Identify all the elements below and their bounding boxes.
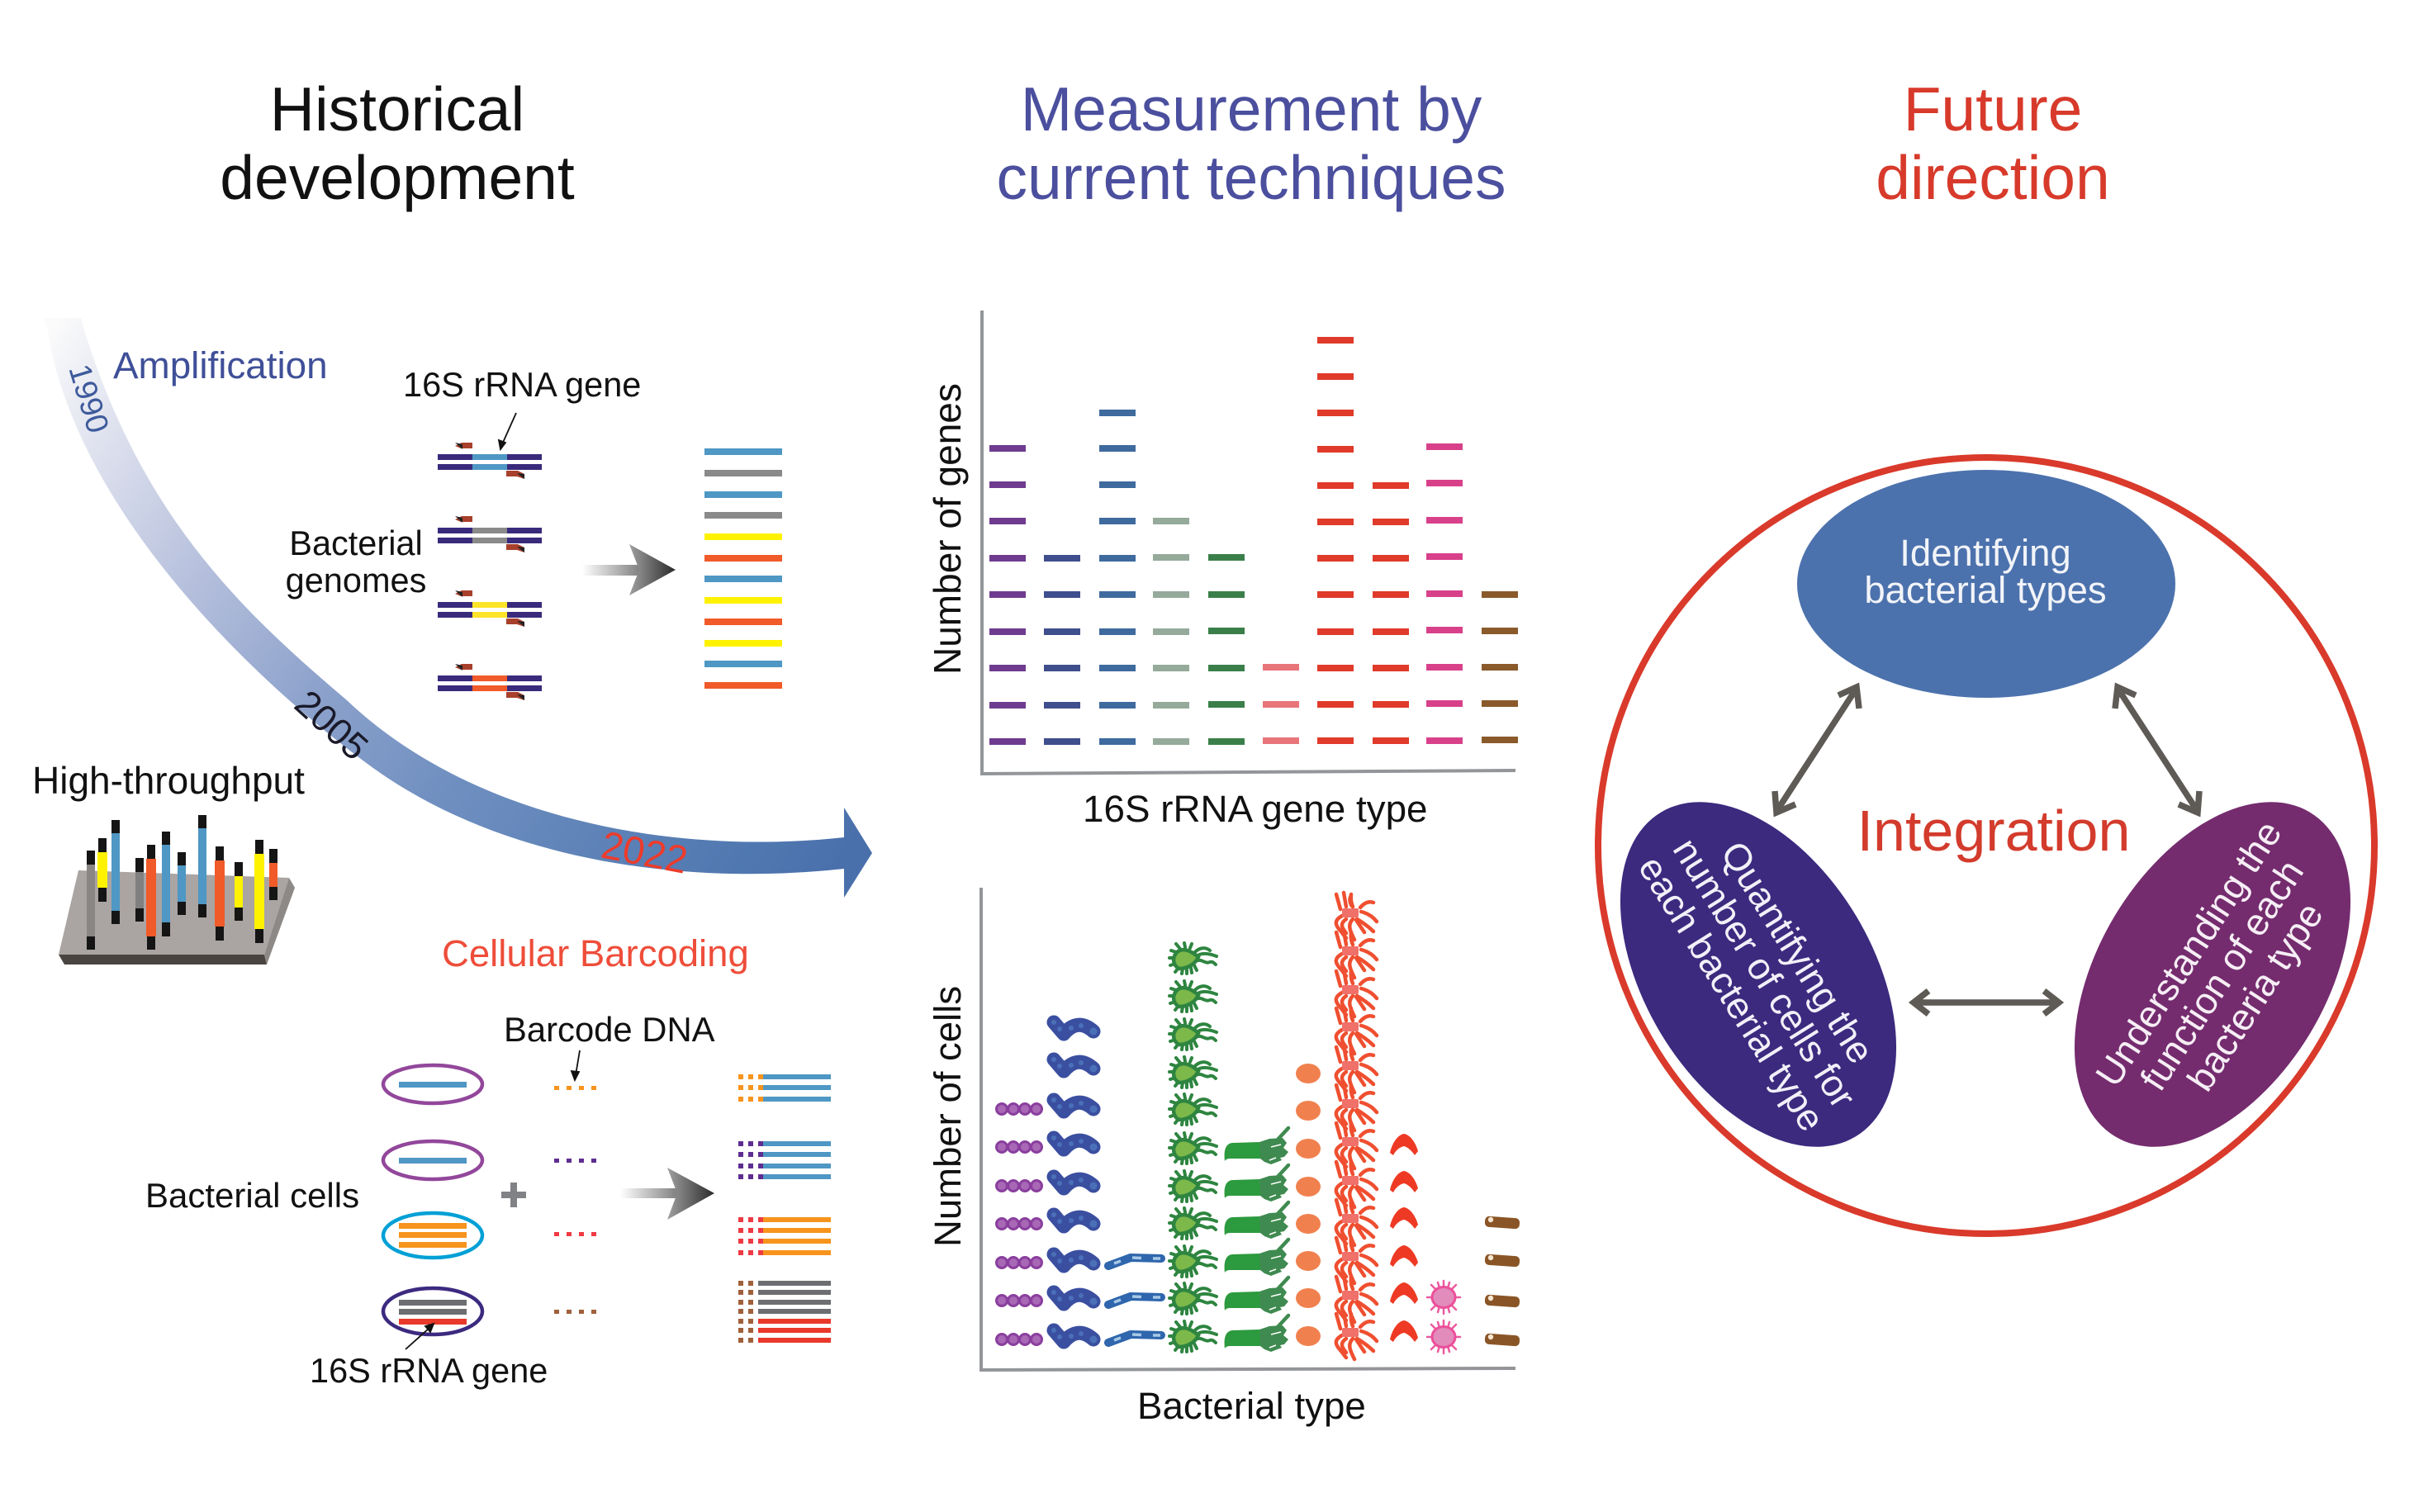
year 2022: 2022	[598, 822, 691, 882]
title: Measurement by current techniques: current techniques	[996, 143, 1506, 212]
oval: quantifying cells: Quantifying the	[1713, 834, 1882, 1071]
icons: red spiders	[1336, 893, 1377, 1359]
title: Historical development	[220, 74, 575, 212]
bars: column 7	[1317, 337, 1354, 744]
arrow: amplification	[582, 544, 676, 595]
label: Bacterial genomes: Bacterial	[289, 524, 423, 562]
oval: quantifying cells: number of cells for	[1665, 831, 1864, 1115]
arrow: 16S pointer	[499, 413, 516, 449]
heading: Amplification: Amplification	[113, 344, 328, 386]
title: Measurement by current techniques	[996, 74, 1506, 212]
chart: genes by 16S rRNA gene type	[926, 310, 1518, 830]
oval: identifying bacterial types: Identifying	[1900, 532, 2071, 574]
title: Future direction	[1876, 74, 2110, 212]
label: Integration: Integration	[1857, 799, 2130, 863]
icon: plus	[501, 1183, 526, 1207]
arrow: 16S pointer in cell	[406, 1324, 434, 1349]
chart: cells by bacterial type	[927, 888, 1520, 1427]
amplified products	[704, 448, 782, 689]
icons: blue curved chains	[1051, 1020, 1097, 1343]
oval: understanding function: Understanding the	[2087, 813, 2290, 1093]
label: Bacterial genomes	[286, 524, 426, 600]
bars: column 6	[1263, 664, 1299, 744]
y axis label: Number of genes	[926, 383, 969, 675]
bars: column 3	[1099, 410, 1136, 745]
label: 16S rRNA gene: 16S rRNA gene	[403, 365, 641, 404]
year 1990: 1990	[61, 360, 115, 437]
arrow: top to right	[2115, 687, 2199, 813]
arrow: top to left	[1775, 687, 1859, 813]
bars: column 10	[1482, 591, 1518, 743]
y axis label: Number of cells	[927, 986, 969, 1247]
barcoded products	[738, 1074, 831, 1343]
bars: column 8	[1373, 482, 1409, 744]
icons: green spiky cells	[1169, 943, 1217, 1352]
oval: quantifying cells	[1563, 754, 1953, 1195]
oval: understanding function	[2018, 754, 2407, 1195]
icon: sequencing chip	[59, 815, 295, 965]
x axis label: Bacterial type	[1137, 1385, 1366, 1427]
barcode DNA dashes	[554, 1086, 596, 1314]
axes	[982, 310, 1515, 774]
arrow: barcode pointer	[572, 1050, 580, 1080]
icons: pink cells	[1427, 1281, 1460, 1353]
title: Measurement by current techniques: Measurement by	[1021, 74, 1482, 144]
year 2005: 2005	[287, 682, 377, 768]
bars: column 9	[1426, 443, 1463, 744]
bars: column 2	[1044, 555, 1080, 745]
icons: red curved cells	[1390, 1134, 1418, 1342]
title: Future direction: direction	[1876, 143, 2110, 212]
icons: orange cocci	[1296, 1064, 1321, 1346]
oval: identifying bacterial types	[1797, 470, 2175, 698]
oval: quantifying cells: each bacterial type	[1630, 849, 1833, 1139]
bacterial cells	[383, 1065, 482, 1334]
bars: column 4	[1153, 518, 1189, 745]
icons: blue rods	[1108, 1258, 1161, 1343]
label: 16S rRNA gene lower: 16S rRNA gene	[310, 1351, 548, 1390]
label: Bacterial genomes: genomes	[286, 561, 426, 600]
icons: green flagellated rods	[1225, 1128, 1288, 1352]
panel: integration circle	[1563, 457, 2407, 1234]
icons: brown rods	[1485, 1216, 1520, 1346]
axes	[981, 888, 1515, 1370]
x axis label: 16S rRNA gene type	[1083, 788, 1428, 830]
arrow: left to right	[1914, 991, 2059, 1014]
heading: Cellular Barcoding: Cellular Barcoding	[442, 932, 749, 974]
panel: timeline arrow	[44, 318, 872, 898]
oval: understanding function: bacteria type	[2179, 895, 2331, 1098]
title: Historical development: development	[220, 143, 575, 212]
title: Historical development: Historical	[270, 74, 524, 144]
icons: purple chains	[996, 1103, 1042, 1344]
arrow: barcoding	[620, 1168, 714, 1220]
label: Barcode DNA: Barcode DNA	[504, 1010, 715, 1049]
label: Bacterial cells: Bacterial cells	[145, 1176, 359, 1215]
title: Future direction: Future	[1904, 74, 2082, 144]
heading: High-throughput: High-throughput	[32, 759, 305, 802]
genomes with primers	[438, 443, 542, 700]
oval: understanding function: function of each	[2132, 852, 2312, 1097]
oval: identifying bacterial types: bacterial types	[1864, 569, 2107, 611]
bars: column 1	[989, 445, 1026, 745]
bars: column 5	[1208, 554, 1245, 745]
